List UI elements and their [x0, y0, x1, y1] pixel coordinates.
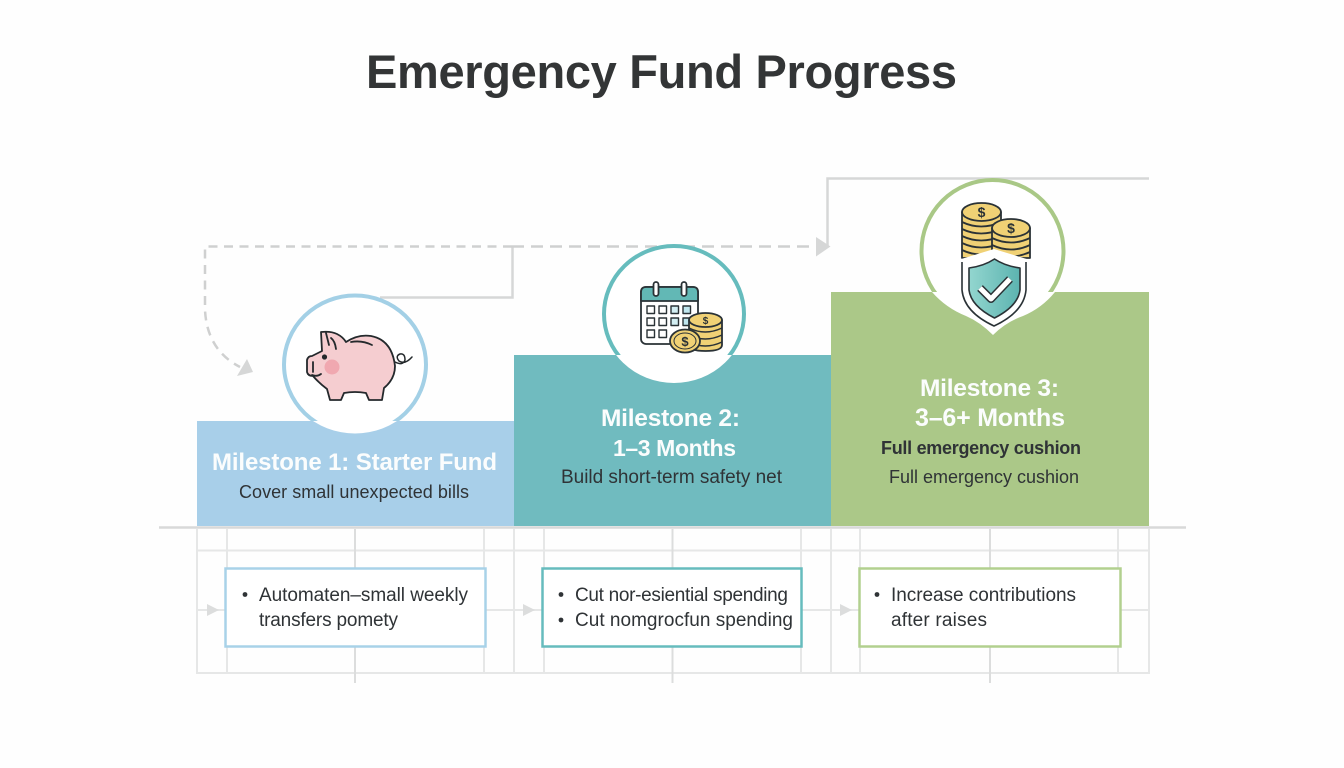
baseline and grid [159, 528, 1186, 683]
icon: calendar with coins: $ [681, 334, 689, 349]
panel: milestone 3 bar [831, 292, 1149, 526]
milestone 1 text: Milestone 1: Starter Fund [212, 449, 497, 476]
panel: milestone 1 bar [197, 421, 514, 526]
milestone 3 text: 3–6+ Months [915, 404, 1065, 432]
circle overlap: milestone 2 [616, 355, 732, 383]
milestone 3 text: Full emergency cushion [889, 467, 1079, 487]
action box 1: Automaten–small weekly [259, 585, 468, 606]
milestone 1 text [212, 449, 497, 502]
action box 3 [860, 568, 1120, 646]
progress path arrows [205, 178, 1149, 376]
milestone 2 text: 1–3 Months [613, 435, 736, 461]
action box 3: Increase contributions [891, 585, 1076, 606]
ring: milestone 1 [284, 296, 426, 434]
icon: coin stacks with shield: $ [978, 204, 986, 220]
panel: milestone 2 bar [514, 355, 831, 526]
pin overlap: milestone 3 [932, 292, 1055, 335]
icon: calendar with coins [641, 282, 722, 352]
milestone 2 text: Milestone 2: [601, 405, 740, 432]
action box 3: after raises [891, 610, 987, 631]
icon: coin stacks with shield: $ [1007, 220, 1015, 236]
icon: coin stacks with shield [958, 203, 1030, 330]
milestone 2 text [561, 405, 783, 488]
action box 1 [226, 568, 486, 646]
milestone 3 text: Milestone 3: [920, 375, 1059, 402]
ring: milestone 3 [922, 180, 1064, 322]
ring: milestone 2 [604, 246, 744, 382]
action box 1: transfers pomety [259, 610, 398, 631]
milestone 1 text: Cover small unexpected bills [239, 482, 469, 502]
action box 2: Cut nomgrocfun spending [575, 610, 793, 631]
circle overlap: milestone 1 [313, 421, 397, 434]
action box 2 [542, 568, 802, 646]
milestone 3 text: Full emergency cushion [881, 438, 1081, 458]
action box 2: Cut nor-esiential spending [575, 585, 788, 606]
icon: piggy bank [307, 332, 412, 400]
title: Emergency Fund Progress [366, 45, 957, 98]
icon: calendar with coins: $ [703, 316, 709, 327]
milestone 3 text [881, 375, 1081, 487]
milestone 2 text: Build short-term safety net [561, 467, 783, 488]
